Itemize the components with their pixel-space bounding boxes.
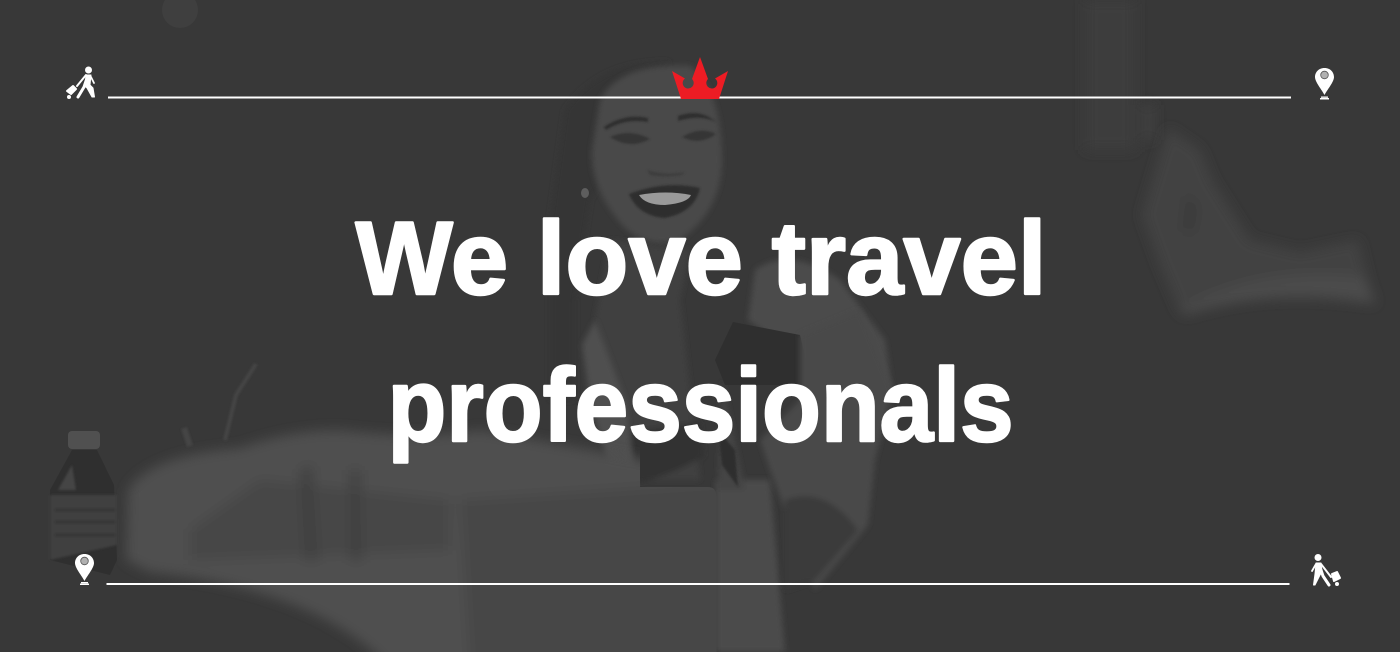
icon: traveller with suitcase, bottom right bbox=[1312, 554, 1340, 586]
woman: dark hair strand bbox=[718, 430, 738, 487]
woman: face bbox=[592, 66, 722, 243]
background: right pillar bbox=[1085, 0, 1154, 150]
title bbox=[356, 201, 1046, 464]
icon: red crown bbox=[672, 57, 728, 99]
bottom divider line bbox=[106, 583, 1290, 585]
icon: location pin, top right bbox=[1315, 68, 1334, 100]
woman: facial features bbox=[581, 113, 716, 218]
woman: neck and chest bbox=[595, 240, 704, 482]
icon: location pin, bottom left bbox=[75, 554, 94, 585]
woman: hair bbox=[550, 62, 670, 400]
woman: hand and phone bbox=[715, 260, 893, 590]
title line 2: professionals bbox=[388, 348, 1014, 464]
woman: lapel and sleeve bbox=[582, 320, 785, 652]
twig bbox=[184, 364, 256, 446]
person at left: shoulder and laptop back bbox=[126, 430, 760, 652]
man at right: ear and neck bbox=[1142, 128, 1376, 315]
bottle bbox=[50, 431, 117, 575]
top divider line bbox=[108, 96, 1291, 98]
background: dim lamp bbox=[162, 0, 198, 28]
title line 1: We love travel bbox=[356, 201, 1046, 317]
icon: traveller with suitcase, top left bbox=[67, 66, 94, 98]
